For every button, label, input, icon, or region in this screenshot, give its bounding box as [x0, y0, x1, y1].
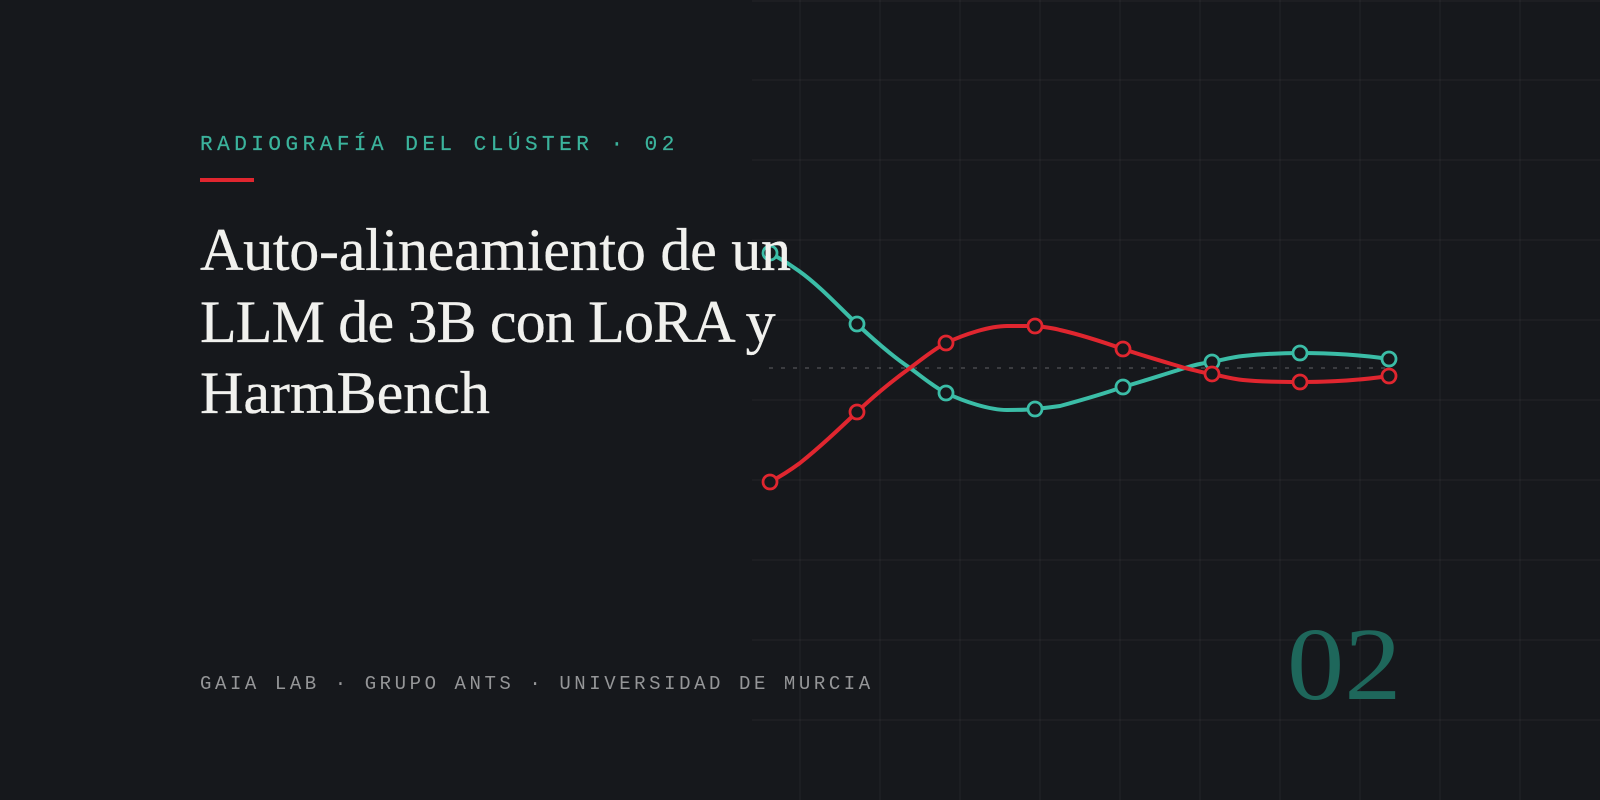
- baseline: dashed reference: [769, 367, 1389, 369]
- title: HarmBench: [200, 360, 490, 426]
- red accent rule: [200, 178, 254, 182]
- title: [200, 217, 791, 426]
- eyebrow: RADIOGRAFÍA DEL CLÚSTER · 02: [200, 134, 679, 156]
- series: teal line: [763, 246, 1396, 416]
- large section number: 02: [1287, 607, 1402, 722]
- footer credit: GAIA LAB · GRUPO ANTS · UNIVERSIDAD DE MURCIA: [200, 673, 874, 695]
- series: red line: [763, 319, 1396, 489]
- title: Auto-alineamiento de un: [200, 217, 791, 283]
- title: LLM de 3B con LoRA y: [200, 288, 775, 354]
